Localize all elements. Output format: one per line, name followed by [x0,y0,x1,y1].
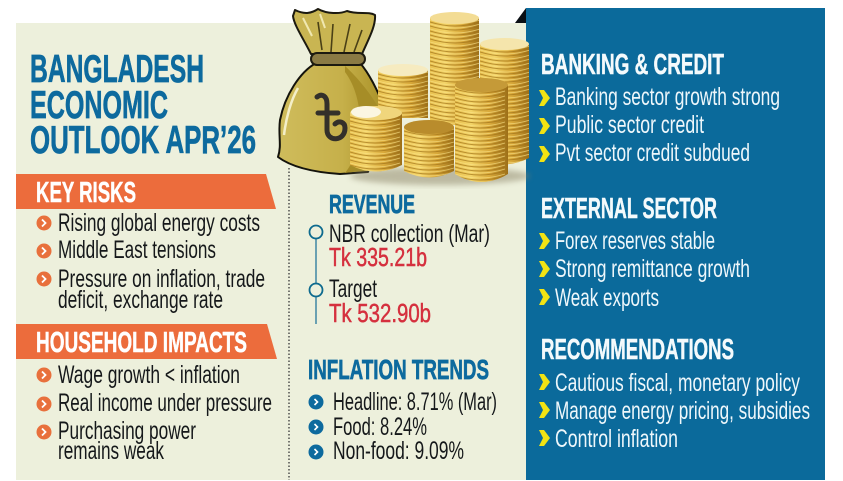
section: external sector: EXTERNAL SECTOR [541,193,717,225]
panel: blue sidebar [515,8,825,480]
list: key risks: Middle East tensions [58,236,216,264]
section: banking and credit: BANKING & CREDIT [541,49,724,81]
list: key risks: deficit, exchange rate [58,286,223,314]
stat: target: Tk 532.90b [329,298,431,328]
list: inflation [308,388,497,465]
banner: household impacts: HOUSEHOLD IMPACTS [36,327,247,359]
panel: household impacts [16,324,277,465]
list: key risks: Pressure on inflation, trade [58,265,265,293]
banner: key risks: KEY RISKS [36,177,136,209]
list: key risks [36,209,265,314]
section: external sector: Forex reserves stable [555,227,715,255]
panel: revenue [310,189,490,328]
icon: money bag [278,9,385,174]
title: BANGLADESH [30,48,204,91]
list: household impacts: Wage growth < inflation [58,361,240,389]
section: banking and credit: Pvt sector credit subdued [555,139,750,167]
panel: key risks [16,174,276,314]
panel: beige background [16,23,526,480]
timeline [310,226,322,324]
list: household impacts: Purchasing power [58,417,196,445]
coin stack: left back [378,64,428,118]
panel: inflation trends [308,354,497,465]
section: recommendations [539,334,810,453]
section: external sector: Strong remittance growth [555,255,750,283]
section: banking and credit: Public sector credit [555,111,704,139]
section: external sector: Weak exports [555,284,659,312]
banner: household impacts [16,324,277,359]
coin stack: front middle [404,120,454,178]
stat: NBR collection: Tk 335.21b [329,242,427,272]
stat: NBR collection [329,220,490,272]
stat: target: Target [329,275,377,303]
coin stack: tall back [430,12,479,125]
title: ECONOMIC [30,84,168,127]
heading: revenue: REVENUE [329,189,415,219]
title [30,48,256,162]
dotted divider [288,168,290,480]
list: household impacts: remains weak [58,437,164,465]
list: inflation: Headline: 8.71% (Mar) [333,388,497,416]
list: key risks: Rising global energy costs [58,209,260,237]
stat: target [329,275,431,328]
coin stack: front right [455,78,508,182]
section: banking and credit [539,49,780,167]
title: OUTLOOK APR’26 [30,119,256,162]
list: inflation: Food: 8.24% [333,413,427,441]
coin stack: right back [480,38,530,166]
list: inflation: Non-food: 9.09% [333,437,464,465]
list: household impacts [36,361,272,465]
section: recommendations: RECOMMENDATIONS [541,334,734,366]
list: household impacts: Real income under pressure [58,389,272,417]
heading: inflation trends: INFLATION TRENDS [308,354,489,385]
section: recommendations: Control inflation [555,425,678,453]
icon: coin stacks [349,12,531,188]
banner: key risks [16,174,276,209]
stat: NBR collection: NBR collection (Mar) [329,220,490,248]
section: external sector [539,193,750,312]
coin stack: front left [350,106,402,172]
